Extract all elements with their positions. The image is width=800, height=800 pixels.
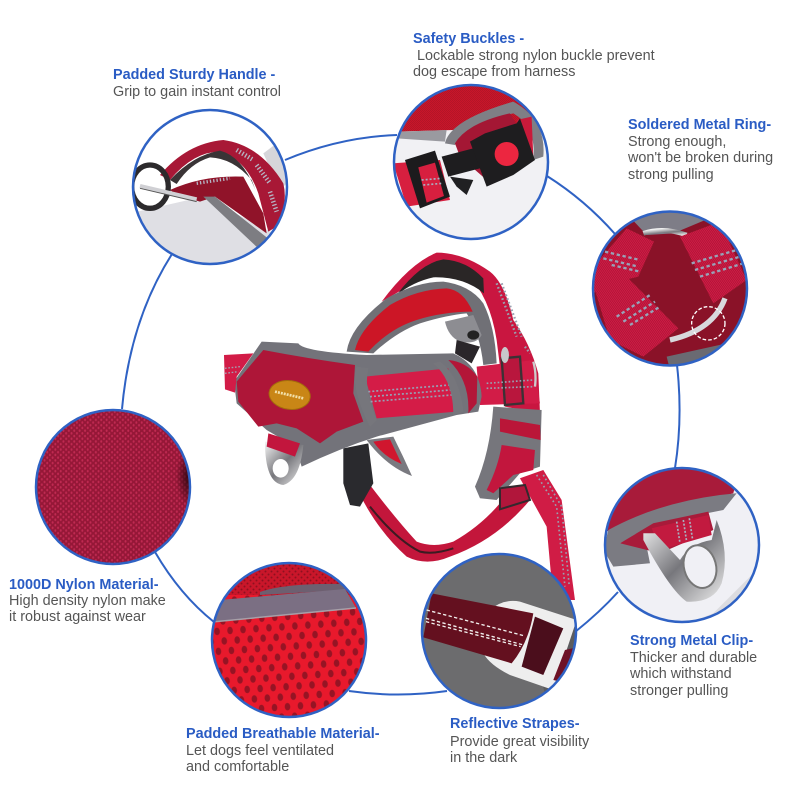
dark handle lining (397, 259, 484, 295)
red fabric (608, 469, 734, 532)
gray edge (204, 196, 266, 247)
label: 1000D nylon material: High density nylon make (9, 593, 166, 609)
lower chest flap (367, 437, 412, 476)
chest mesh panel (347, 282, 497, 365)
label: soldered metal ring: Strong enough, (628, 134, 726, 150)
red lock button (495, 142, 519, 166)
label: safety buckles: dog escape from harness (413, 64, 575, 80)
reflective stitching (497, 283, 530, 353)
crossing straps (593, 228, 654, 293)
label: soldered metal ring: Soldered Metal Ring- (628, 117, 771, 133)
collar strap left tip (224, 353, 253, 393)
detail: metal ring photo (594, 212, 746, 364)
panel fold (448, 360, 477, 413)
label: strong metal clip: which withstand (629, 666, 732, 682)
strap (393, 160, 450, 207)
label: soldered metal ring: won't be broken during (627, 150, 773, 166)
padded panel (170, 176, 267, 233)
belly strap (357, 485, 530, 562)
chest strap through panel (365, 368, 457, 418)
label: padded breathable material: and comfortable (186, 759, 289, 775)
label: soldered metal ring: strong pulling (628, 167, 714, 183)
metal clip (643, 520, 725, 602)
rear ring (445, 315, 482, 342)
label: safety buckles: Lockable strong nylon buckle prevent (417, 48, 655, 64)
ring (643, 230, 687, 235)
label: safety buckles: Safety Buckles - (413, 31, 524, 47)
detail: breathable mesh photo (210, 560, 370, 720)
detail: metal clip photo (606, 469, 758, 620)
detail: nylon fabric photo (37, 411, 189, 563)
side adjuster buckle (502, 357, 523, 405)
gray band (603, 493, 737, 567)
circle frame: breathable mesh (212, 563, 366, 717)
circle frame: buckle (394, 85, 548, 239)
chest plate (234, 342, 482, 467)
photo: main harness (224, 253, 575, 600)
black belly buckle (343, 443, 373, 507)
connecting ring arcs (122, 135, 680, 694)
circle frame: metal ring (593, 212, 747, 366)
label: padded sturdy handle: Grip to gain instant control (113, 84, 281, 100)
gray trim (445, 102, 544, 160)
label: padded breathable material (186, 726, 380, 775)
strap (423, 593, 533, 663)
back straps (477, 360, 540, 405)
label: strong metal clip: stronger pulling (630, 683, 728, 699)
clip strap (652, 515, 712, 550)
label: reflective strapes: Provide great visibility (450, 734, 590, 750)
right vest side (475, 407, 542, 500)
label: reflective strapes (450, 716, 590, 766)
circle frame: nylon fabric (36, 410, 190, 564)
label: padded breathable material: Padded Breathable Material- (186, 726, 380, 742)
detail: buckle photo (395, 86, 546, 238)
label: padded breathable material: Let dogs feel ventilated (186, 743, 334, 759)
handle strap arch (160, 140, 285, 232)
label: strong metal clip: Strong Metal Clip- (630, 633, 753, 649)
label: safety buckles (413, 31, 655, 80)
leash strap (520, 470, 575, 600)
dark ring (132, 165, 168, 208)
label: strong metal clip (629, 633, 757, 699)
logo badge (267, 378, 312, 412)
label: reflective strapes: Reflective Strapes- (450, 716, 580, 732)
detail: handle photo (134, 140, 286, 263)
circle frame: handle (133, 110, 287, 264)
circle frame: metal clip (605, 468, 759, 622)
label: padded sturdy handle (113, 67, 281, 100)
label: padded sturdy handle: Padded Sturdy Handle - (113, 67, 276, 83)
black buckle (405, 151, 450, 208)
label: 1000D nylon material (9, 577, 166, 625)
lower slider (500, 485, 530, 509)
circle frame: reflective strap (422, 554, 576, 708)
label: 1000D nylon material: it robust against wear (9, 609, 146, 625)
label: strong metal clip: Thicker and durable (630, 650, 757, 666)
label: 1000D nylon material: 1000D Nylon Material- (9, 577, 159, 593)
handle strap loop (382, 253, 540, 413)
label: reflective strapes: in the dark (450, 750, 518, 766)
detail: reflective strap photo (420, 553, 580, 713)
white buckle (483, 601, 577, 690)
label: soldered metal ring (627, 117, 773, 183)
front metal clip (265, 442, 303, 485)
